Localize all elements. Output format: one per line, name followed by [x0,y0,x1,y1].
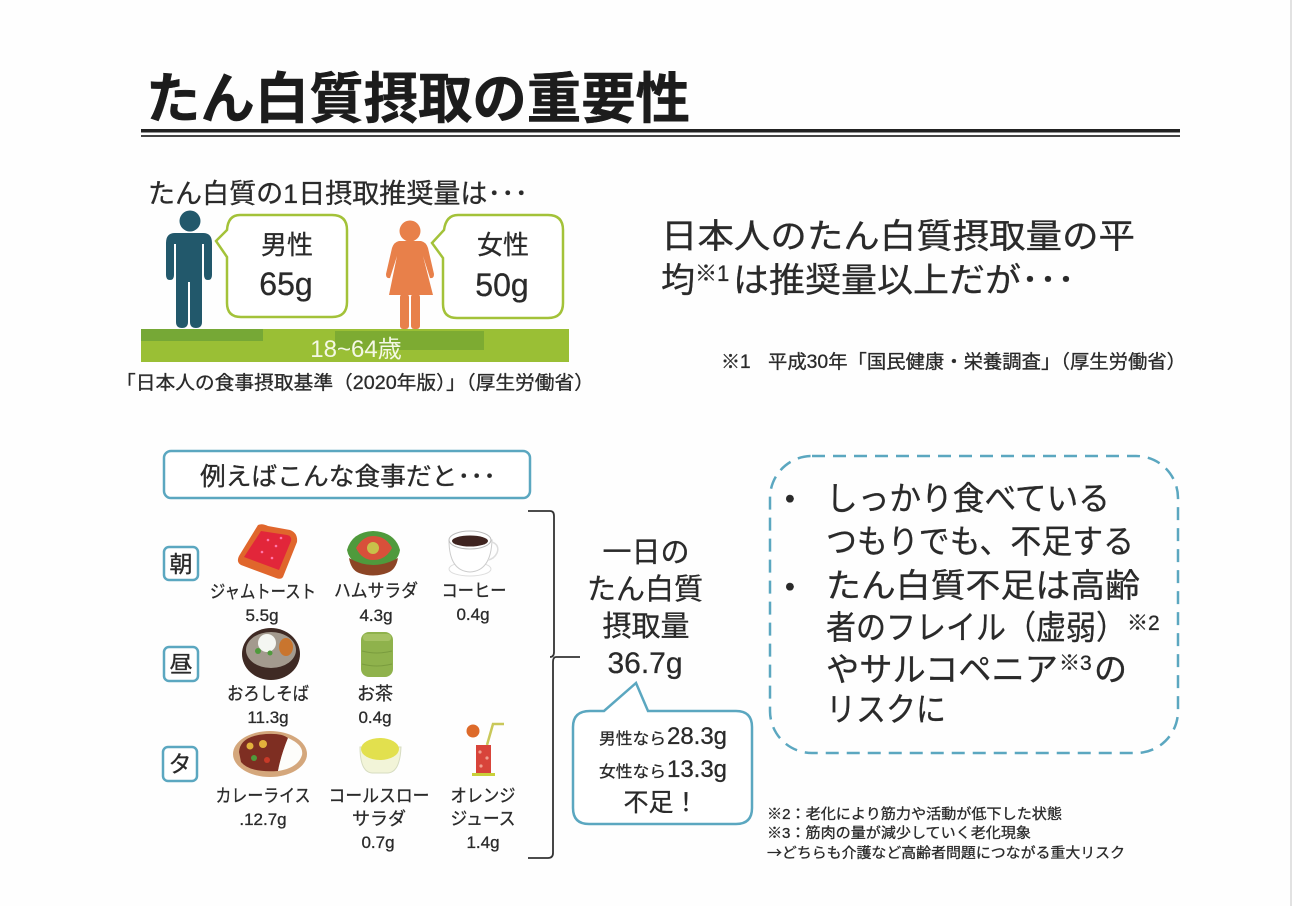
footnotes 2 and 3: ※2：老化により筋力や活動が低下した状態 [767,806,1062,823]
food: orange juice: オレンジ [450,786,516,806]
callout: male: 65g [259,266,313,302]
bracket [528,511,580,858]
callout: male: 男性 [261,230,313,260]
panel: risk [770,456,1178,753]
panel: risk: たん白質不足は高齢 [826,567,1140,604]
callout: shortfall: 13.3g [667,756,727,783]
callout: female: 女性 [477,230,529,260]
title: たん白質摂取の重要性 [146,68,690,130]
text block: average intake: 日本人のたん白質摂取量の平 [661,218,1135,256]
footnotes 2 and 3: →どちらも介護など高齢者問題につながる重大リスク [767,842,1125,863]
title [141,68,1180,137]
callout: shortfall: 不足！ [623,789,699,817]
food: orange juice: 1.4g [466,833,500,852]
heading: recommended intake: たん白質の1日摂取推奨量は･･･ [148,179,528,209]
food: coleslaw salad [328,738,430,852]
icon: man [166,210,212,328]
heading: example meals [164,451,530,498]
panel: risk: • [785,571,795,602]
food: coffee [442,531,506,624]
label: lunch [164,647,198,681]
food: coffee: コーヒー [442,581,506,601]
panel: risk: • [785,483,795,514]
food: ham salad [334,531,418,625]
food: oroshi soba: おろしそば [227,684,309,704]
age band [141,329,569,363]
panel: risk: の [1094,651,1127,688]
food: green tea: 0.4g [358,708,392,727]
food: coffee: 0.4g [456,605,490,624]
food: curry rice [216,731,310,829]
food: coleslaw salad: コールスロー [328,786,430,806]
food: oroshi soba [227,628,309,727]
callout: female [432,215,563,318]
panel: recommended daily intake [116,179,594,394]
callout: shortfall: 28.3g [667,723,727,750]
text block: daily total [587,537,703,680]
text block: daily total: 36.7g [607,647,683,680]
panel: risk: しっかり食べている [826,480,1110,517]
food: coleslaw salad: サラダ [352,809,406,829]
label: dinner [163,747,197,781]
age band: 18~64歳 [310,336,402,363]
panel: risk: リスクに [826,691,946,728]
food: orange juice [450,724,516,852]
panel: risk: ※2 [1127,612,1160,635]
panel: risk: つもりでも、不足する [826,523,1134,560]
food: curry rice: カレーライス [216,786,310,806]
food: jam toast [210,524,316,625]
food: ham salad: ハムサラダ [334,581,418,601]
callout: shortfall: 男性なら [599,730,666,748]
text block: daily total: 一日の [602,537,690,569]
panel: risk: 者のフレイル（虚弱） [826,609,1126,646]
food: coleslaw salad: 0.7g [361,833,395,852]
callout: shortfall [573,683,752,824]
footnotes 2 and 3 [767,806,1125,863]
callout: male [216,215,347,317]
food: curry rice: .12.7g [239,810,287,829]
food: orange juice: ジュース [450,809,516,829]
panel: risk: やサルコペニア [826,651,1058,688]
food: jam toast: ジャムトースト [210,582,316,602]
footnote 1: 平成30年「国民健康・栄養調査」（厚生労働省） [768,351,1186,373]
callout: female: 50g [475,267,529,303]
label: breakfast [164,547,198,580]
callout: shortfall: 女性なら [599,763,666,781]
food: oroshi soba: 11.3g [247,708,289,727]
food: green tea: お茶 [357,684,393,704]
text block: average intake [661,218,1135,300]
footnote 1: ※1 [721,352,751,373]
text block: daily total: 摂取量 [602,610,690,643]
food: jam toast: 5.5g [245,606,279,625]
panel: risk: ※3 [1059,652,1092,675]
icon: woman [386,220,434,329]
footnotes 2 and 3: ※3：筋肉の量が減少していく老化現象 [767,825,1031,842]
text block: daily total: たん白質 [587,573,703,606]
label: breakfast: 朝 [170,551,192,577]
food: ham salad: 4.3g [359,606,393,625]
label: lunch: 昼 [170,651,192,677]
text block: average intake: は推奨量以上だが･･･ [733,262,1075,300]
source note: 「日本人の食事摂取基準（2020年版）」（厚生労働省） [116,372,594,394]
food: green tea [357,632,393,727]
text block: average intake: ※1 [695,261,729,286]
text block: average intake: 均 [661,262,695,300]
heading: example meals: 例えばこんな食事だと･･･ [200,463,496,491]
label: dinner: タ [168,751,192,777]
